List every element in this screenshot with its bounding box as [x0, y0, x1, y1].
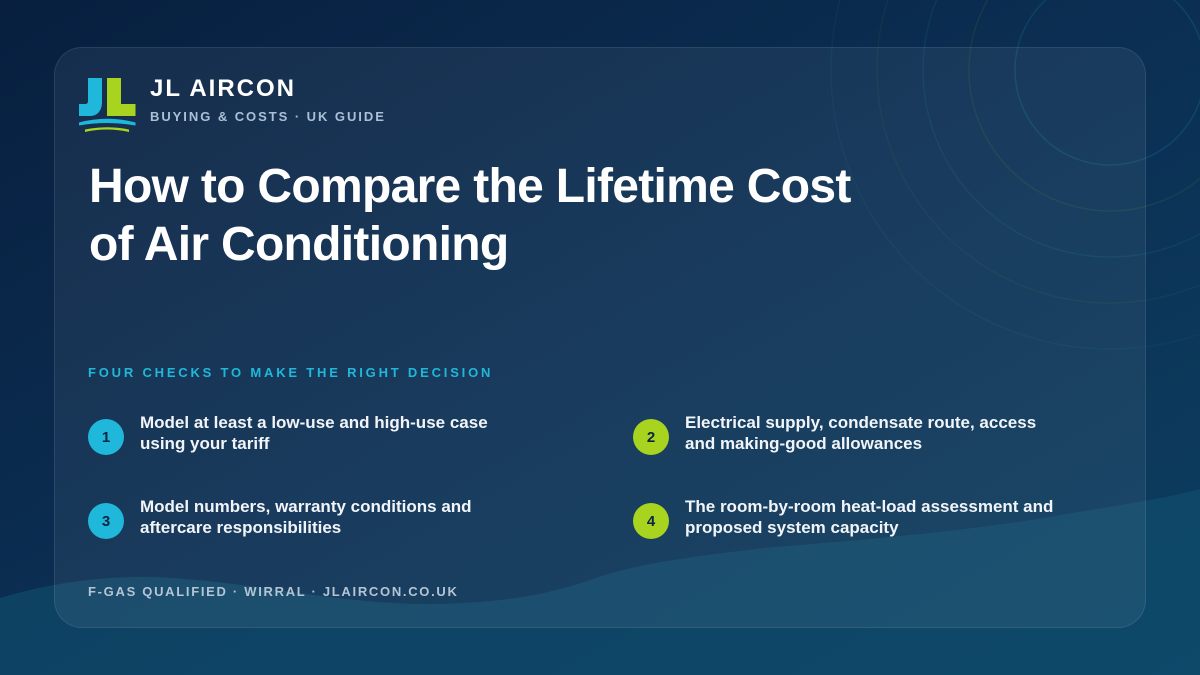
brand subtitle: BUYING & COSTS · UK GUIDE	[150, 109, 386, 124]
check 1	[88, 413, 488, 455]
brand name: JL AIRCON	[150, 75, 296, 102]
check 1: Model at least a low-use and high-use case	[140, 413, 488, 432]
check 1: using your tariff	[140, 434, 269, 453]
check 1: 1	[102, 429, 110, 446]
check 4: proposed system capacity	[685, 518, 899, 537]
check 3: Model numbers, warranty conditions and	[140, 497, 472, 516]
check 2: 2	[647, 429, 655, 446]
icon: JL logo	[79, 78, 136, 132]
title	[89, 160, 851, 271]
panel: main card	[54, 47, 1146, 628]
check 3: aftercare responsibilities	[140, 518, 341, 537]
check 4: 4	[647, 513, 655, 530]
check 4: The room-by-room heat-load assessment and	[685, 497, 1053, 516]
check 2	[633, 413, 1036, 455]
title: of Air Conditioning	[89, 218, 508, 271]
title: How to Compare the Lifetime Cost	[89, 160, 851, 213]
check 2: and making-good allowances	[685, 434, 922, 453]
section heading: FOUR CHECKS TO MAKE THE RIGHT DECISION	[88, 365, 493, 380]
check 3	[88, 497, 472, 539]
check 4	[633, 497, 1053, 539]
check 3: 3	[102, 513, 110, 530]
footer text: F-GAS QUALIFIED · WIRRAL · JLAIRCON.CO.UK	[88, 584, 459, 599]
check 2: Electrical supply, condensate route, access	[685, 413, 1036, 432]
